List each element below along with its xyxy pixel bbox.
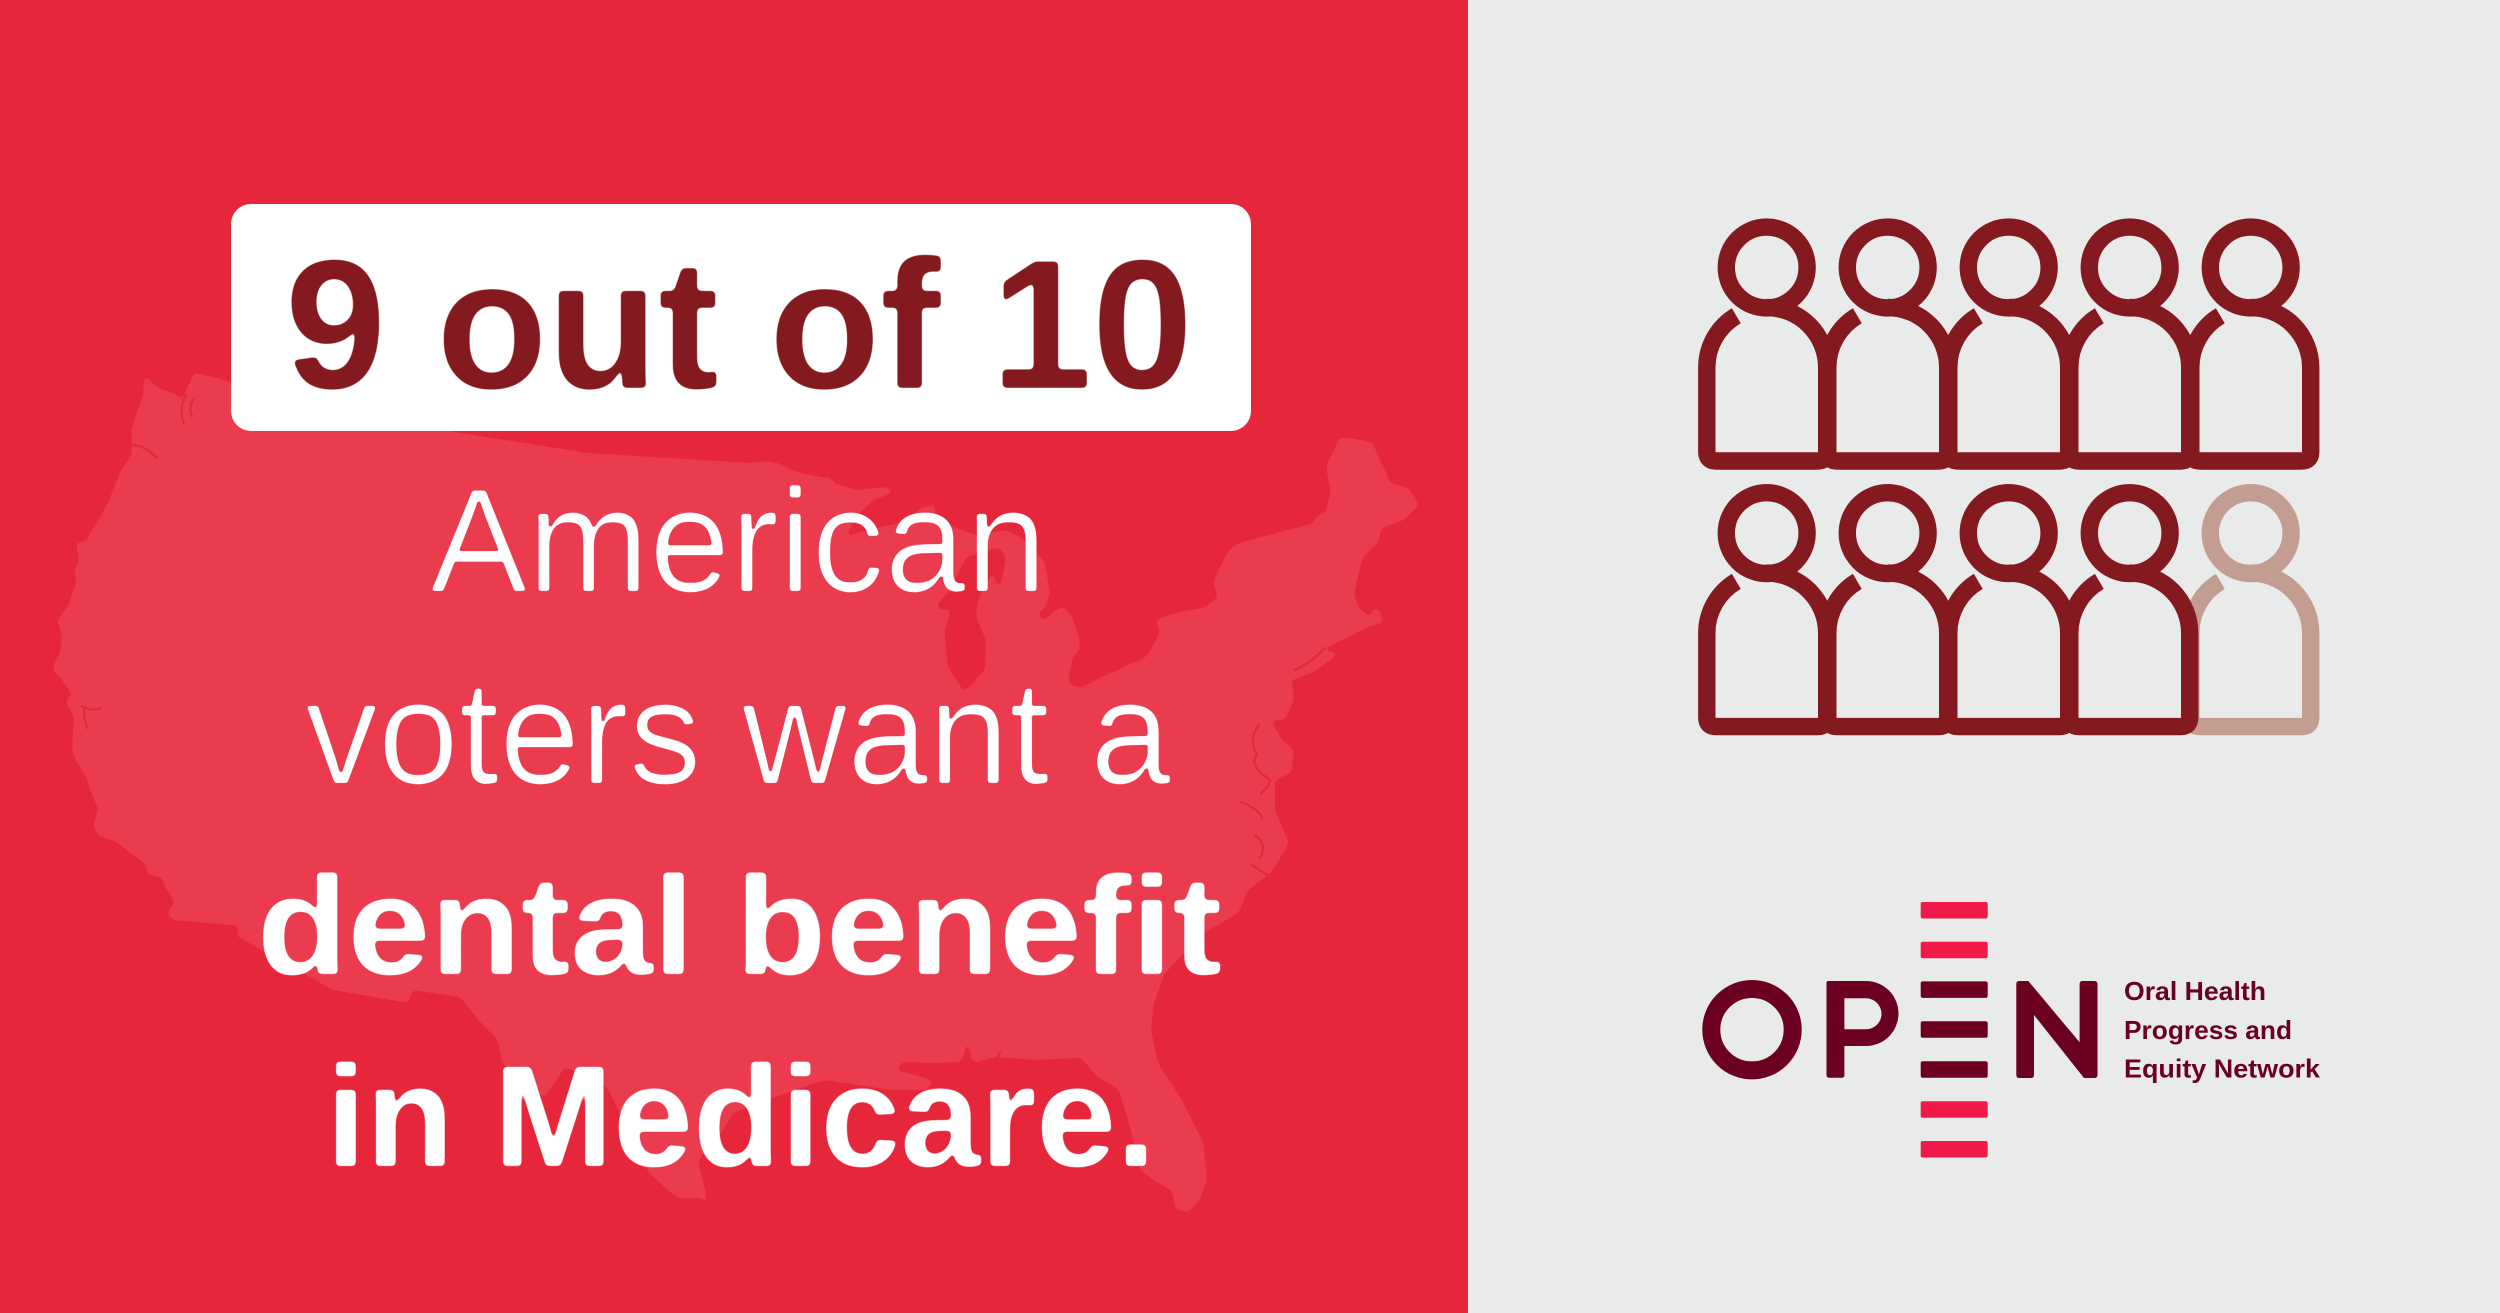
headline text bbox=[257, 459, 1222, 1197]
headline text: dental benefit bbox=[257, 847, 1222, 1004]
logo letter O bbox=[1711, 989, 1793, 1070]
headline text: American bbox=[430, 459, 1047, 622]
logo tagline: Progress and bbox=[2124, 1017, 2292, 1045]
icon: faded person 10 bbox=[2191, 493, 2311, 727]
logo tagline: Oral Health bbox=[2124, 978, 2266, 1006]
map: United States silhouette bbox=[52, 372, 1419, 1212]
pictogram: 9 of 10 people bbox=[1707, 227, 2311, 727]
map: coastal inlets bbox=[82, 395, 1325, 1180]
panel: grey side panel bbox=[1468, 0, 2500, 1313]
logo letter P bbox=[1826, 981, 1898, 1078]
logo letter N bbox=[2016, 981, 2098, 1078]
icon: people row 1 bbox=[1707, 227, 2311, 461]
logo tagline bbox=[2124, 978, 2321, 1083]
logo tagline: Equity Network bbox=[2124, 1055, 2321, 1083]
stat text: 9 out of 10: 9 out of 10 bbox=[285, 221, 1193, 427]
stat box bbox=[231, 204, 1251, 431]
icon: people row 2 bbox=[1707, 493, 2190, 727]
logo: OPEN Oral Health Progress and Equity Network bbox=[1711, 902, 2321, 1158]
headline text: voters want a bbox=[305, 651, 1172, 814]
panel: red message panel bbox=[0, 0, 1468, 1313]
headline text: in Medicare. bbox=[326, 1036, 1156, 1197]
logo letter E: stacked bars bbox=[1921, 902, 1988, 1158]
